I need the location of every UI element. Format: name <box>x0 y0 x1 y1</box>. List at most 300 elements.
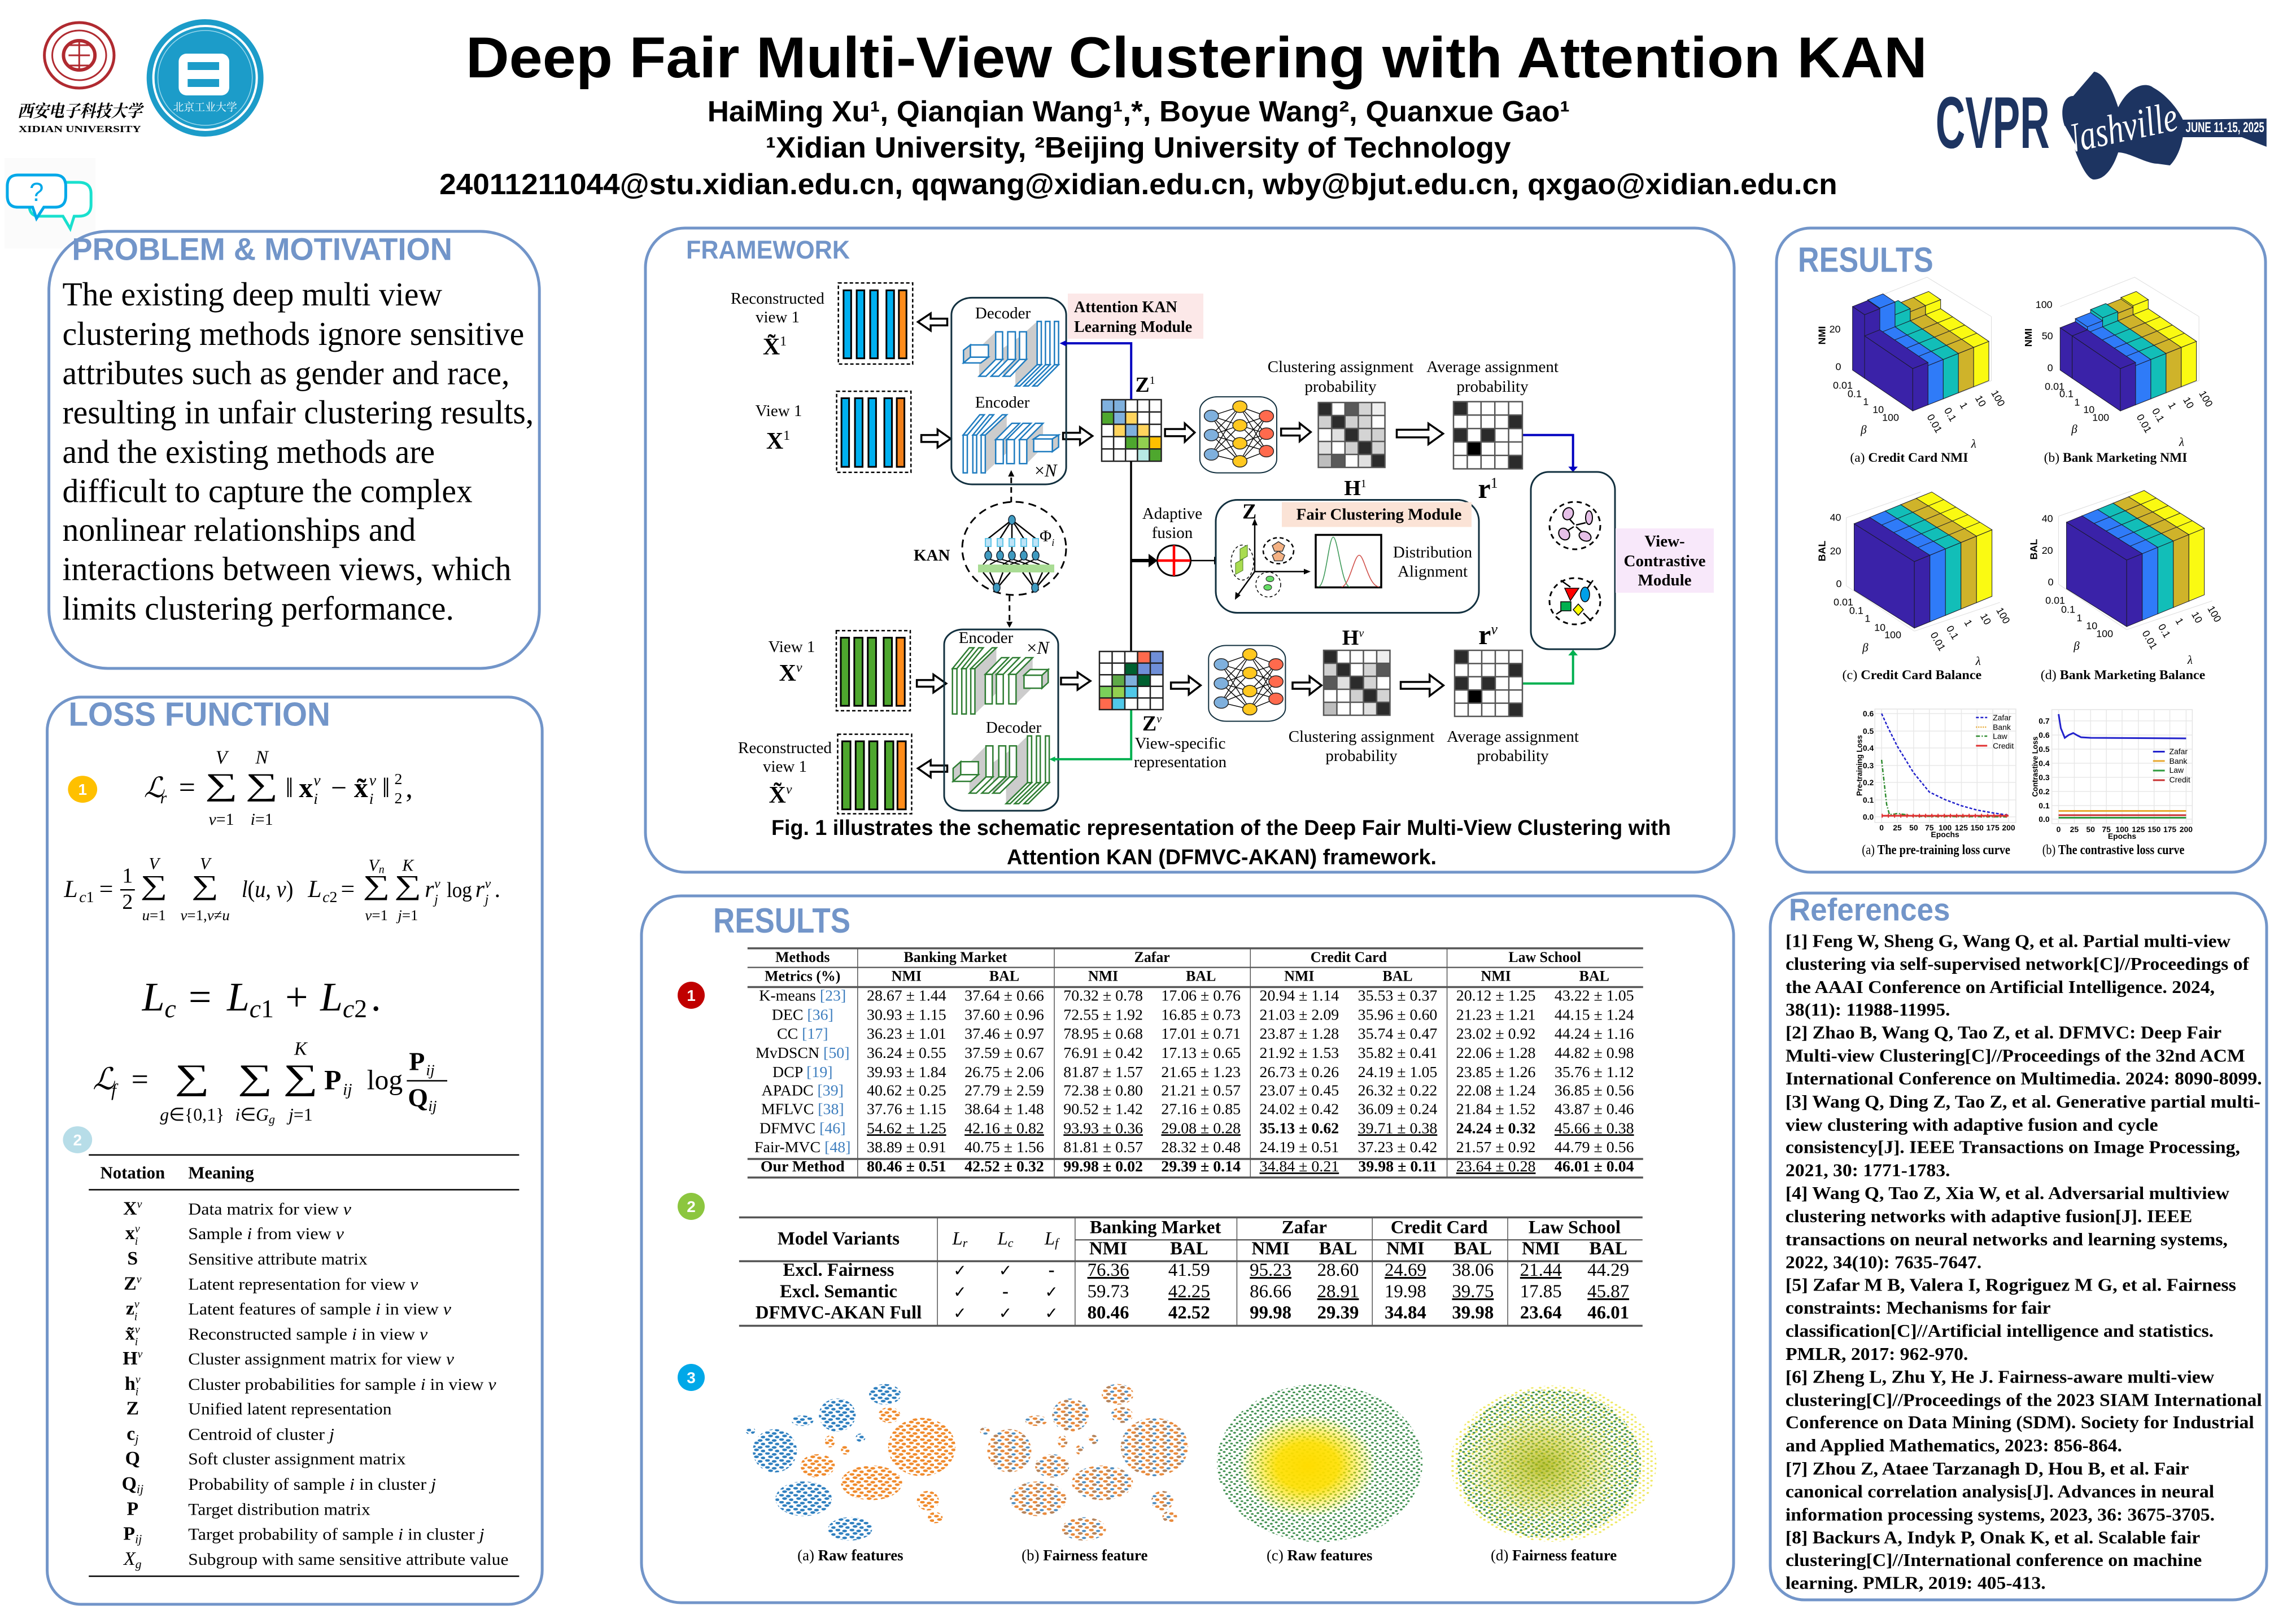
labels: view v: v <box>796 660 802 675</box>
labels: view 1 clustering: Clustering assignment <box>1268 358 1413 376</box>
axis labels: chart c: 20 <box>1830 545 1841 557</box>
axis labels: chart b: β <box>2071 422 2077 436</box>
table: notation: x̃ <box>125 1323 135 1344</box>
axis labels: chart c: 1 <box>1962 618 1975 628</box>
line chart: contrastive loss: 200 <box>2180 825 2193 834</box>
axis labels: chart a: 100 <box>1882 412 1899 423</box>
table: comparison with baselines <box>748 948 1643 1178</box>
axis labels: chart b: 10 <box>2083 404 2094 415</box>
text block: reference list: learning. PMLR, 2019: 405-413. <box>1786 1573 2046 1593</box>
table: comparison with baselines: 37.46 ± 0.97 <box>964 1025 1044 1043</box>
caption: pre-training curve: (a) The pre-training loss curve <box>1862 843 2010 858</box>
badge: table 2 <box>678 1193 705 1220</box>
diagram: view v branch, feature bars, encoder and decoder <box>836 596 1131 814</box>
axis labels: chart c: 100 <box>1994 606 2012 625</box>
table: comparison with baselines: 42.16 ± 0.82 <box>964 1119 1044 1137</box>
heading: framework: FRAMEWORK <box>686 235 850 264</box>
line chart: contrastive loss <box>2031 710 2193 841</box>
caption: chart a: (a) Credit Card NMI <box>1850 450 1968 465</box>
equation: total contrastive loss: L <box>226 975 250 1020</box>
equation: total contrastive loss: + <box>285 975 308 1020</box>
axis labels: chart b: 0.01 <box>2135 412 2154 435</box>
labels: view 1: 1 <box>1150 374 1155 387</box>
axis labels: chart c: λ <box>1975 654 1981 668</box>
equation: reconstruction loss: ∑ <box>205 767 238 802</box>
adaptive fusion node <box>1131 505 1221 576</box>
equation: fairness loss: g <box>269 1112 275 1126</box>
table: ablation study model variants: 41.59 <box>1168 1260 1210 1280</box>
text block: reference list: [5] Zafar M B, Valera I, Rogriguez M G, et al. Fairness <box>1786 1275 2236 1294</box>
line chart: pre-training loss: 0 <box>1879 823 1884 832</box>
table: comparison with baselines: 43.22 ± 1.05 <box>1555 987 1634 1004</box>
axis labels: chart b: 100 <box>2197 389 2215 409</box>
table: ablation study model variants: 99.98 <box>1250 1303 1291 1323</box>
equation: total contrastive loss: = <box>189 975 211 1020</box>
table: comparison with baselines: Our Method <box>761 1158 845 1175</box>
module: fair clustering: Z <box>1242 500 1256 524</box>
table: comparison with baselines: 36.85 ± 0.56 <box>1555 1082 1634 1100</box>
arrow: green line to decoder <box>1049 710 1131 762</box>
neural network 1 <box>1200 397 1277 473</box>
table: notation: S <box>127 1248 138 1269</box>
text block: reference list: Conference on Data Mining (SDM). Society for Industrial <box>1786 1412 2254 1432</box>
table: comparison with baselines: 35.96 ± 0.60 <box>1358 1006 1437 1023</box>
equation: reconstruction loss: i=1 <box>251 810 273 829</box>
panel: references <box>1770 893 2267 1600</box>
table: notation: h <box>125 1373 136 1394</box>
table: comparison with baselines: 44.82 ± 0.98 <box>1555 1044 1634 1062</box>
table: comparison with baselines: 20.12 ± 1.25 <box>1456 987 1535 1004</box>
matrix: r1 <box>1453 402 1522 469</box>
labels: view 1 clustering: 1 <box>1491 475 1498 491</box>
figure caption: Attention KAN (DFMVC-AKAN) framework. <box>1007 846 1437 869</box>
axis labels: chart a: 1 <box>1957 400 1970 411</box>
table: comparison with baselines: 40.62 ± 0.25 <box>867 1082 946 1100</box>
decoder layers view v <box>953 736 1049 804</box>
labels: view v: ×N <box>1027 637 1050 658</box>
table: comparison with baselines: 35.74 ± 0.47 <box>1358 1025 1437 1043</box>
table: comparison with baselines: 44.24 ± 1.16 <box>1555 1025 1634 1043</box>
table: ablation study model variants: Banking Market <box>1090 1217 1221 1237</box>
axis labels: chart c: 10 <box>1874 622 1885 633</box>
labels: view v: Encoder <box>959 629 1014 647</box>
equation: reconstruction loss: V <box>216 747 229 768</box>
module: fair clustering: Distribution <box>1393 543 1473 561</box>
text block: reference list: clustering[C]//Proceedings of the 2023 SIAM International <box>1786 1390 2262 1410</box>
axis labels: chart d: 40 <box>2042 513 2053 524</box>
equation: contrastive losses: = <box>99 876 113 903</box>
line chart: contrastive loss: 50 <box>2087 825 2095 834</box>
axis labels: chart d <box>2028 513 2224 667</box>
labels: view v: View-specific <box>1135 734 1225 753</box>
labels: view v: representation <box>1134 753 1227 771</box>
labels: view v: Decoder <box>986 719 1041 737</box>
line chart: contrastive loss: Zafar <box>2170 747 2188 756</box>
table: comparison with baselines: 44.15 ± 1.24 <box>1555 1006 1634 1023</box>
axis labels: chart a: λ <box>1971 437 1976 450</box>
table: comparison with baselines: 23.02 ± 0.92 <box>1456 1025 1535 1043</box>
table: comparison with baselines: 29.39 ± 0.14 <box>1161 1158 1241 1175</box>
authors: HaiMing Xu¹, Qianqian Wang¹,*, Boyue Wang², Quanxue Gao¹ <box>708 95 1570 128</box>
table: comparison with baselines: NMI <box>1481 968 1511 985</box>
contact emails: 24011211044@stu.xidian.edu.cn, qqwang@xidian.edu.cn, wby@bjut.edu.cn, qxgao@xidian.edu.cn <box>439 168 1837 200</box>
line chart: pre-training loss: 100 <box>1939 823 1952 832</box>
equation: contrastive losses: r <box>475 877 485 903</box>
table: ablation study model variants: 59.73 <box>1088 1281 1129 1302</box>
table: comparison with baselines: MvDSCN [50] <box>756 1044 849 1062</box>
bar charts: parameter sensitivity <box>1846 277 2212 631</box>
axis labels: chart d: 10 <box>2189 610 2205 625</box>
axis labels: chart b: 100 <box>2036 299 2053 310</box>
table: ablation study model variants: 28.91 <box>1317 1281 1359 1302</box>
equation: contrastive losses: r <box>425 877 434 903</box>
axis labels: chart d: 100 <box>2096 628 2113 639</box>
table: comparison with baselines: 54.62 ± 1.25 <box>867 1119 946 1137</box>
line chart: contrastive loss: 125 <box>2132 825 2145 834</box>
table: comparison with baselines: NMI <box>1088 968 1118 985</box>
icon: question speech bubbles: ? <box>29 177 43 207</box>
table: comparison with baselines: 22.08 ± 1.24 <box>1456 1082 1536 1100</box>
labels: view v clustering: Average assignment <box>1447 728 1579 746</box>
affiliations: ¹Xidian University, ²Beijing University of Technology <box>766 131 1511 164</box>
line chart: contrastive loss: 0.1 <box>2039 801 2050 810</box>
table: ablation study model variants: DFMVC-AKAN Full <box>756 1303 922 1323</box>
references content <box>1786 893 2262 1593</box>
axis labels: chart a: 20 <box>1830 323 1841 335</box>
arrow: decoder to reconstruction <box>918 313 948 331</box>
table: ablation study model variants: 39.75 <box>1452 1281 1494 1302</box>
table: notation: i <box>136 1386 138 1398</box>
table: notation: ij <box>137 1482 143 1496</box>
callout: view-contrastive module: View- <box>1644 532 1685 550</box>
table: notation: Probability of sample i in cluster j <box>188 1475 436 1494</box>
table: comparison with baselines: 37.64 ± 0.66 <box>964 987 1044 1004</box>
text block: motivation: interactions between views, which <box>62 550 512 588</box>
text block: reference list: [4] Wang Q, Tao Z, Xia W, et al. Adversarial multiview <box>1786 1183 2229 1203</box>
table: ablation study model variants: ✓ <box>999 1261 1012 1280</box>
table: comparison with baselines: 37.23 ± 0.42 <box>1358 1139 1437 1156</box>
labels: view 1 <box>731 290 1155 480</box>
line chart: pre-training loss: 150 <box>1971 823 1984 832</box>
table: comparison with baselines: Methods <box>775 949 830 965</box>
table: notation: v <box>137 1198 142 1210</box>
equation: fairness loss: K <box>294 1039 308 1060</box>
equation: contrastive losses: = <box>341 876 355 903</box>
table: notation: v <box>136 1373 141 1386</box>
table: comparison with baselines: Banking Market <box>903 949 1007 965</box>
equation: fairness loss: Q <box>408 1083 428 1112</box>
equation: fairness loss: log <box>367 1064 403 1095</box>
table: ablation study model variants: 44.29 <box>1587 1260 1629 1280</box>
equation: contrastive losses: n <box>379 863 385 876</box>
table: ablation study model variants: 29.39 <box>1317 1303 1359 1323</box>
axis labels: chart b: λ <box>2179 435 2184 449</box>
equation: contrastive losses: V <box>149 854 161 873</box>
text block: reference list: transactions on neural networks and learning systems, <box>1786 1230 2228 1249</box>
panel: framework <box>645 228 1734 872</box>
line chart: contrastive loss: 0.3 <box>2039 773 2050 782</box>
line chart: contrastive loss: 0.5 <box>2039 745 2050 754</box>
axis labels: chart d: 0.1 <box>2061 604 2075 615</box>
table: comparison with baselines: 44.79 ± 0.56 <box>1555 1139 1634 1156</box>
labels: view v: View 1 <box>769 638 815 656</box>
equation: contrastive losses: j <box>483 893 489 907</box>
table: ablation study model variants: Excl. Fairness <box>783 1260 894 1280</box>
line chart: pre-training loss: 175 <box>1987 823 2000 832</box>
table: notation: Cluster probabilities for sample i in view v <box>188 1375 496 1394</box>
labels: view 1 clustering: probability <box>1304 378 1377 396</box>
equation: contrastive losses: v <box>434 877 440 891</box>
equation: total contrastive loss: c2 <box>343 994 367 1023</box>
module: view contrastive <box>1531 472 1615 649</box>
table: comparison with baselines: 35.82 ± 0.41 <box>1358 1044 1437 1062</box>
labels: view v clustering: v <box>1359 627 1364 640</box>
axis labels: chart c: 100 <box>1884 629 1901 640</box>
callout: attention KAN learning module: Learning Module <box>1074 318 1192 336</box>
equation: reconstruction loss: v=1 <box>209 810 234 829</box>
table: ablation study model variants: 17.85 <box>1520 1281 1562 1302</box>
axis labels: chart c: 0.1 <box>1849 605 1863 616</box>
axis labels: chart b: 1 <box>2166 400 2179 411</box>
table: ablation study model variants: 42.52 <box>1168 1303 1210 1323</box>
table: ablation study model variants: Law School <box>1529 1217 1621 1237</box>
table: comparison with baselines: 21.65 ± 1.23 <box>1161 1064 1241 1081</box>
panel: results right <box>1776 228 2266 872</box>
text block: reference list: clustering networks with adaptive fusion[J]. IEEE <box>1786 1206 2192 1226</box>
equation: fairness loss: P <box>324 1064 342 1095</box>
line chart: contrastive loss: Contrastive Loss <box>2031 736 2040 797</box>
text block: reference list: clustering via self-supervised network[C]//Proceedings of <box>1786 954 2249 974</box>
table: comparison with baselines: 46.01 ± 0.04 <box>1555 1158 1634 1175</box>
callout: view-contrastive module <box>1616 528 1714 593</box>
table: comparison with baselines: 26.73 ± 0.26 <box>1260 1064 1339 1081</box>
labels: view 1 clustering: Average assignment <box>1426 358 1559 376</box>
table: comparison with baselines: 76.91 ± 0.42 <box>1063 1044 1143 1062</box>
axis labels: chart c: BAL <box>1817 541 1828 562</box>
panel: loss function <box>47 695 542 1604</box>
table: ablation study model variants: L <box>952 1228 963 1249</box>
equation: contrastive losses: ∑ <box>191 870 219 900</box>
text block: motivation: and the existing methods are <box>62 433 435 470</box>
view v bars <box>836 631 910 711</box>
panel: problem and motivation <box>49 231 539 668</box>
logo: Beijing University of Technology <box>147 19 264 137</box>
equation: contrastive losses: L <box>307 876 322 903</box>
line chart: pre-training loss: Zafar <box>1993 713 2011 722</box>
equation: contrastive losses: K <box>401 856 414 874</box>
line chart: pre-training loss: 0.6 <box>1863 709 1874 718</box>
labels: view 1 clustering <box>1268 358 1559 504</box>
KAN module: i <box>1051 537 1054 548</box>
table: ablation study model variants: 38.06 <box>1452 1260 1494 1280</box>
table: ablation study model variants: c <box>1008 1236 1014 1250</box>
text block: motivation: difficult to capture the complex <box>62 472 473 509</box>
text block: reference list: Multi-view Clustering[C]//Proceedings of the 32nd ACM <box>1786 1045 2245 1065</box>
table: ablation study model variants: NMI <box>1522 1239 1560 1259</box>
text block: reference list: PMLR, 2017: 962-970. <box>1786 1344 1968 1364</box>
axis labels: chart b: 1 <box>2074 396 2080 408</box>
arrow: network to assignment <box>1281 423 1311 441</box>
table: comparison with baselines: DEC [36] <box>772 1006 833 1023</box>
table: notation: Meaning <box>188 1163 254 1183</box>
arrow: average to contrastive module <box>1522 435 1578 472</box>
decoder layers <box>963 321 1059 386</box>
labels: view v: v <box>1156 713 1162 725</box>
table: comparison with baselines: 17.01 ± 0.71 <box>1161 1025 1241 1043</box>
text block: reference list: view clustering with adaptive fusion and cycle <box>1786 1115 2158 1135</box>
line chart: pre-training loss: Pre-training Loss <box>1854 735 1863 796</box>
table: comparison with baselines: 20.94 ± 1.14 <box>1260 987 1339 1004</box>
table: ablation study model variants: 21.44 <box>1520 1260 1562 1280</box>
table: comparison with baselines: 24.02 ± 0.42 <box>1260 1100 1339 1118</box>
caption: chart d: (d) Bank Marketing Balance <box>2041 668 2205 682</box>
text block: reference list: [3] Wang Q, Ding Z, Tao Z, et al. Generative partial multi- <box>1786 1092 2260 1112</box>
equation: contrastive losses: v <box>485 877 491 891</box>
table: comparison with baselines: 42.52 ± 0.32 <box>964 1158 1044 1175</box>
text block: reference list: [2] Zhao B, Wang Q, Tao Z, et al. DFMVC: Deep Fair <box>1786 1023 2221 1043</box>
table: comparison with baselines: 37.59 ± 0.67 <box>964 1044 1044 1062</box>
line chart: pre-training loss: 0.4 <box>1863 743 1874 753</box>
caption: chart c: (c) Credit Card Balance <box>1842 668 1981 682</box>
labels: view v clustering: probability <box>1477 747 1549 765</box>
axis labels: chart c: 1 <box>1865 613 1870 624</box>
line chart: pre-training loss: 75 <box>1925 823 1934 832</box>
labels: view v: X <box>779 660 796 686</box>
line chart: contrastive loss: Credit <box>2170 775 2190 784</box>
axis labels: chart c: 0 <box>1836 578 1842 589</box>
equation: reconstruction loss: 2 <box>394 771 402 788</box>
table: comparison with baselines: 37.60 ± 0.96 <box>964 1006 1044 1023</box>
labels: view v clustering: r <box>1478 619 1491 650</box>
table: ablation study model variants: ✓ <box>953 1304 967 1323</box>
table: comparison with baselines: 72.55 ± 1.92 <box>1063 1006 1143 1023</box>
labels: view v clustering <box>1289 619 1579 765</box>
logo: Beijing University of Technology: 北京工业大学 <box>173 99 237 114</box>
text block: reference list: [7] Zhou Z, Ataee Tarzanagh D, Hou B, et al. Fair <box>1786 1459 2189 1478</box>
heading: results center: RESULTS <box>713 902 850 940</box>
text block: reference list: the AAAI Conference on Artificial Intelligence. 2024, <box>1786 977 2215 997</box>
line chart: pre-training loss: 0.0 <box>1863 812 1874 821</box>
axis labels: chart b: NMI <box>2023 329 2034 347</box>
table: comparison with baselines: 23.07 ± 0.45 <box>1260 1082 1339 1100</box>
table: ablation study model variants: 45.87 <box>1587 1281 1629 1302</box>
text block: motivation: limits clustering performance. <box>62 589 454 627</box>
table: notation: H <box>123 1348 138 1369</box>
equation: contrastive losses: c2 <box>322 889 337 906</box>
table: notation: Z <box>126 1398 139 1419</box>
equation: contrastive losses: l(u, v) <box>242 877 293 903</box>
scatter captions: (c) Raw features <box>1267 1547 1372 1564</box>
equation: reconstruction loss: v <box>313 772 321 789</box>
equation: fairness loss: ij <box>343 1080 352 1099</box>
axis labels: chart b: 50 <box>2042 330 2053 342</box>
table: ablation study model variants: ✓ <box>953 1261 967 1280</box>
adaptive fusion node: fusion <box>1152 524 1193 542</box>
encoder layers <box>963 415 1059 473</box>
view 1 bars <box>837 391 911 473</box>
table: ablation study model variants: 80.46 <box>1088 1303 1129 1323</box>
table: notation: Latent features of sample i in view v <box>188 1300 452 1318</box>
axis labels: chart c: 0.1 <box>1944 624 1961 641</box>
table: comparison with baselines: 24.19 ± 1.05 <box>1358 1064 1437 1081</box>
table: ablation study model variants: 23.64 <box>1520 1303 1562 1323</box>
axis labels: chart b: 10 <box>2181 395 2196 410</box>
labels: view v clustering: H <box>1342 626 1359 650</box>
table: notation: P <box>126 1499 138 1520</box>
table: notation: Sample i from view v <box>188 1224 344 1243</box>
badge: table 1 <box>678 982 705 1009</box>
table: comparison with baselines: BAL <box>1186 968 1216 985</box>
labels: view 1: Encoder <box>975 393 1030 412</box>
axis labels: chart c: 10 <box>1978 611 1993 627</box>
axis labels: chart a: β <box>1860 423 1867 436</box>
table: comparison with baselines: 37.76 ± 1.15 <box>867 1100 946 1118</box>
axis labels: chart b: 0 <box>2048 362 2053 374</box>
table: notation: Data matrix for view v <box>188 1200 352 1218</box>
text block: motivation: resulting in unfair clustering results, <box>62 393 534 431</box>
axis labels: chart d: β <box>2073 639 2080 653</box>
table: ablation study model variants: ✓ <box>999 1304 1012 1323</box>
line chart: contrastive loss: 0 <box>2057 825 2061 834</box>
equation: contrastive losses: log <box>447 878 472 902</box>
callout: view-contrastive module: Contrastive <box>1624 552 1706 570</box>
text block: reference list: [6] Zheng L, Zhu Y, He J. Fairness-aware multi-view <box>1786 1367 2214 1387</box>
equation: reconstruction loss: ‖ <box>285 772 293 803</box>
badge: table 1: 1 <box>687 987 696 1004</box>
table: comparison with baselines: 39.93 ± 1.84 <box>867 1064 946 1081</box>
adaptive fusion node: Adaptive <box>1142 505 1202 523</box>
table: notation: Soft cluster assignment matrix <box>188 1450 405 1468</box>
header block <box>5 19 2267 248</box>
scatter plots: t-SNE visualizations <box>745 1384 1656 1542</box>
table: notation: X <box>124 1548 136 1569</box>
line chart: contrastive loss: 175 <box>2163 825 2176 834</box>
heading: results right: RESULTS <box>1798 241 1933 280</box>
table: notation: Reconstructed sample i in view v <box>188 1325 428 1344</box>
heading: references: References <box>1789 893 1950 928</box>
table: notation: Unified latent representation <box>188 1400 392 1419</box>
table: ablation study model variants: L <box>997 1228 1008 1249</box>
table: ablation study model variants: Zafar <box>1282 1217 1327 1237</box>
table: comparison with baselines: 23.87 ± 1.28 <box>1260 1025 1339 1043</box>
table: comparison with baselines: NMI <box>892 968 922 985</box>
table: comparison with baselines: 40.75 ± 1.56 <box>964 1139 1044 1156</box>
table: comparison with baselines: Fair-MVC [48] <box>754 1139 851 1156</box>
labels: view 1: ×N <box>1034 460 1058 480</box>
badge: visualization <box>678 1364 705 1391</box>
equation: fairness loss: P <box>409 1047 425 1076</box>
equation: contrastive losses: v=1,v≠u <box>181 907 230 924</box>
table: notation: Q <box>125 1448 140 1469</box>
table: ablation study model variants: f <box>1055 1236 1060 1250</box>
table: comparison with baselines: 81.81 ± 0.57 <box>1063 1139 1143 1156</box>
text block: reference list: information processing systems, 2023, 36: 3675-3705. <box>1786 1504 2215 1524</box>
table: ablation study model variants: ✓ <box>1045 1304 1058 1323</box>
line chart: contrastive loss: 0.0 <box>2039 815 2050 824</box>
equation: contrastive losses: ∑ <box>141 870 168 900</box>
equation: reconstruction loss: ℒ <box>144 771 165 804</box>
table: notation: v <box>138 1348 143 1360</box>
equation: fairness loss: ij <box>426 1062 435 1079</box>
equation: fairness loss <box>93 1039 447 1126</box>
equation: reconstruction loss: = <box>179 772 195 804</box>
table: notation: Sensitive attribute matrix <box>188 1250 368 1268</box>
equation: reconstruction loss: ‖ <box>382 772 390 803</box>
figure caption: Fig. 1 illustrates the schematic representation of the Deep Fair Multi-View Clustering with <box>771 816 1671 840</box>
line: black trunk between latent grids <box>1130 461 1132 651</box>
table: ablation study model variants: 19.98 <box>1385 1281 1426 1302</box>
text block: motivation: clustering methods ignore sensitive <box>62 315 524 352</box>
